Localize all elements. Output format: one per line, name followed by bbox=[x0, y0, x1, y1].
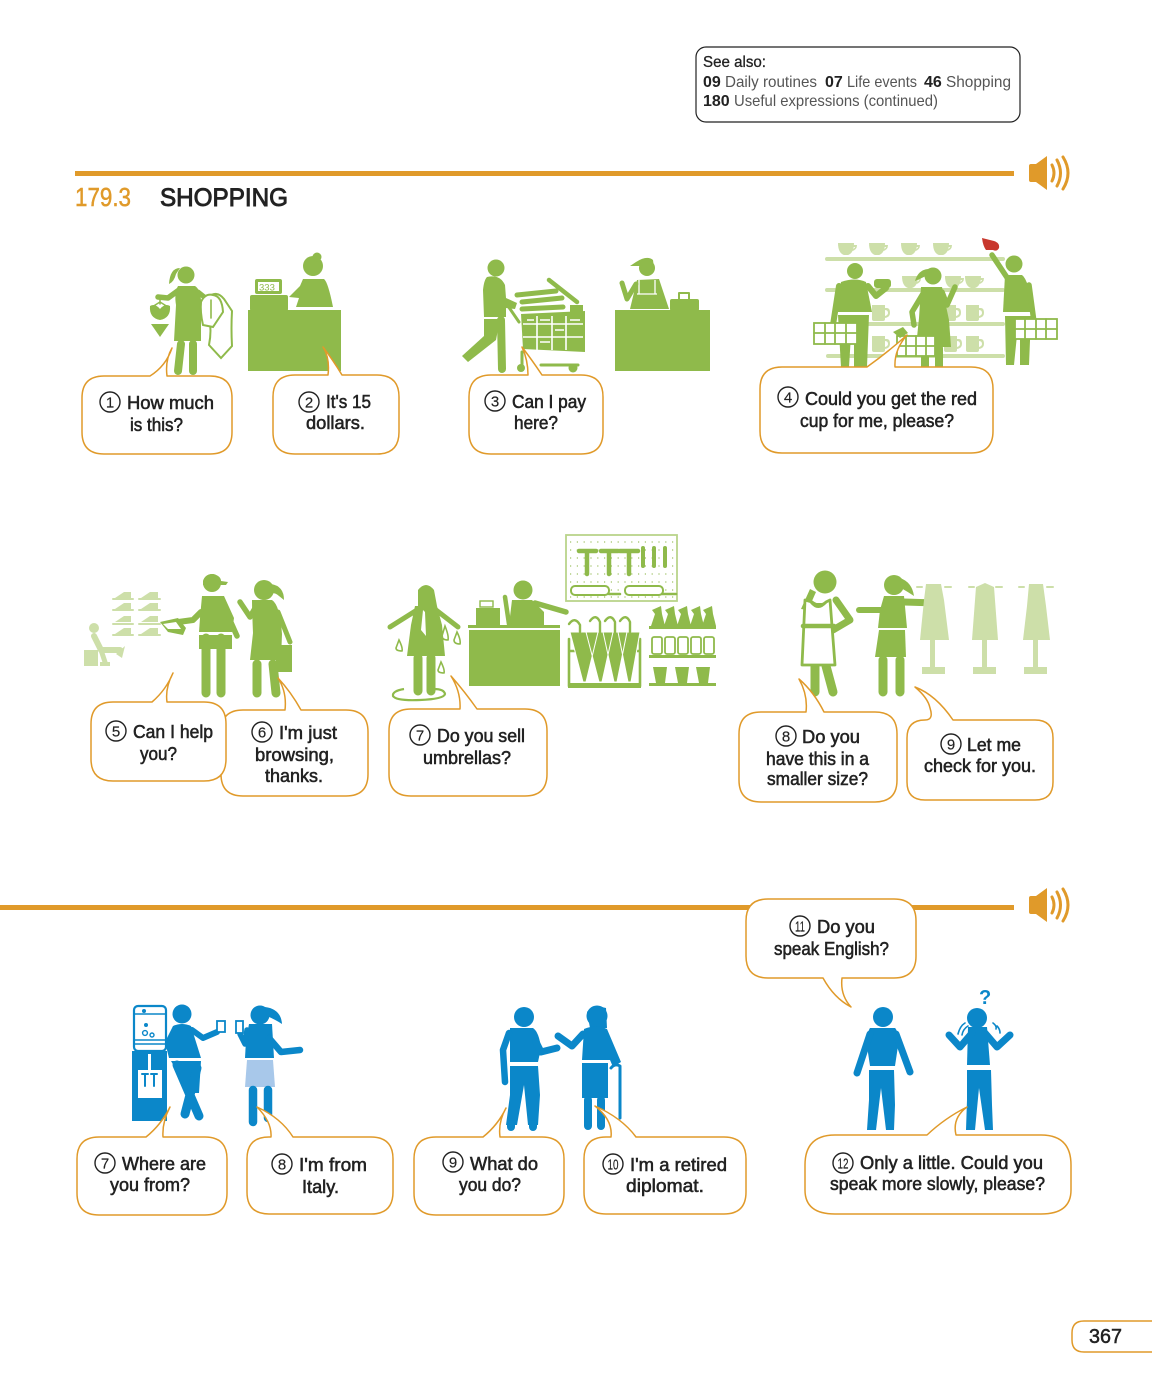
heading: shopping: SHOPPING bbox=[160, 184, 288, 212]
illustration: shop assistant with shoe bbox=[160, 574, 237, 693]
callout 4 bbox=[760, 335, 993, 453]
callout 8 lower bbox=[247, 1107, 393, 1214]
section rule: second section bbox=[0, 905, 1014, 910]
callout 6: I'm just bbox=[279, 723, 337, 743]
illustration: shopkeeper at counter bbox=[468, 580, 566, 686]
callout 9 lower: 9 bbox=[449, 1154, 457, 1172]
callout 8 lower: 8 bbox=[278, 1156, 286, 1174]
callout 5: 5 bbox=[112, 724, 120, 740]
illustration: woman with basket bbox=[893, 268, 955, 367]
see also box: Shopping bbox=[946, 74, 1011, 91]
callout 11: 11 bbox=[795, 918, 805, 936]
callout 6: 6 bbox=[258, 724, 266, 742]
callout 6: thanks. bbox=[265, 766, 323, 786]
callout 9 bbox=[907, 687, 1053, 800]
callout 8: 8 bbox=[782, 728, 790, 746]
callout 11: Do you bbox=[817, 917, 875, 937]
callout 3: Can I pay bbox=[512, 392, 586, 412]
icon: red cup bbox=[982, 238, 999, 251]
callout 7 lower bbox=[77, 1107, 227, 1215]
callout 2: 2 bbox=[305, 394, 313, 412]
callout 8: smaller size? bbox=[767, 769, 868, 789]
illustration: confused man with question mark: ? bbox=[979, 987, 991, 1009]
callout 3: here? bbox=[514, 413, 558, 433]
illustration: man reaching red cup bbox=[982, 238, 1057, 365]
callout 9 lower: you do? bbox=[459, 1175, 521, 1195]
callout 7: Do you sell bbox=[437, 726, 525, 746]
icon: speaker top bbox=[1029, 156, 1068, 190]
callout 2: dollars. bbox=[306, 413, 365, 433]
illustration: shelves with cups bbox=[827, 243, 1003, 356]
see also box: 46 bbox=[924, 74, 942, 91]
callout 8: Do you bbox=[802, 727, 860, 747]
callout 9: check for you. bbox=[924, 756, 1036, 776]
callout 12: Only a little. Could you bbox=[860, 1153, 1043, 1173]
see also box: 07 bbox=[825, 74, 843, 91]
callout 8: have this in a bbox=[766, 749, 870, 769]
illustration: woman with swimwear bbox=[150, 266, 232, 371]
illustration: standing man bbox=[857, 1007, 910, 1130]
see also box: Life events bbox=[847, 74, 917, 91]
illustration: woman with cup bbox=[236, 1006, 300, 1122]
callout 1 bbox=[82, 348, 232, 454]
illustration: cashier at counter: 333 bbox=[259, 282, 275, 294]
callout 9: 9 bbox=[947, 736, 955, 754]
illustration: cashier with cap bbox=[615, 258, 710, 371]
illustration: seated customer trying shoes bbox=[84, 623, 125, 666]
callout 9 lower bbox=[414, 1108, 564, 1215]
callout 2 bbox=[273, 347, 399, 454]
see also box: See also: bbox=[703, 54, 766, 71]
callout 3: 3 bbox=[491, 394, 499, 410]
callout 8 bbox=[739, 679, 897, 802]
callout 7: umbrellas? bbox=[423, 748, 511, 768]
callout 7 lower: you from? bbox=[110, 1175, 190, 1195]
callout 2: It's 15 bbox=[326, 392, 371, 412]
see also box bbox=[696, 47, 1020, 122]
callout 6 bbox=[221, 678, 368, 796]
see also box: 180 bbox=[703, 93, 730, 110]
illustration: woman holding dress bbox=[801, 570, 850, 692]
icon: speaker lower bbox=[1029, 888, 1068, 922]
callout 11 bbox=[746, 899, 916, 1007]
illustration: tool pegboard bbox=[566, 535, 677, 601]
illustration: umbrella stand bbox=[568, 617, 641, 688]
illustration: cashier at counter bbox=[248, 252, 341, 371]
callout 10 bbox=[584, 1106, 746, 1214]
callout 12: 12 bbox=[838, 1156, 848, 1172]
callout 9 lower: What do bbox=[470, 1154, 538, 1174]
callout 11: speak English? bbox=[774, 939, 889, 959]
illustration: shop assistant pointing bbox=[859, 575, 936, 692]
section rule: shopping bbox=[75, 171, 1014, 176]
callout 12 bbox=[805, 1107, 1071, 1214]
callout 8 lower: I'm from bbox=[299, 1155, 367, 1175]
callout 10: diplomat. bbox=[626, 1176, 704, 1196]
illustration: elderly woman with cane bbox=[558, 1006, 621, 1126]
illustration: shopper holding cup bbox=[814, 263, 891, 367]
callout 6: browsing, bbox=[255, 745, 334, 765]
callout 1: is this? bbox=[130, 415, 183, 435]
illustration: confused man with question mark bbox=[949, 987, 1010, 1130]
see also box: Useful expressions (continued) bbox=[734, 93, 938, 110]
page number tab: 367 bbox=[1089, 1326, 1122, 1348]
callout 8 lower: Italy. bbox=[302, 1177, 339, 1197]
illustration: wet woman dripping bbox=[390, 585, 460, 700]
callout 1: 1 bbox=[106, 394, 114, 412]
callout 4: 4 bbox=[784, 390, 792, 406]
callout 4: cup for me, please? bbox=[800, 411, 954, 431]
callout 7 bbox=[389, 676, 547, 796]
callout 1: How much bbox=[127, 393, 214, 413]
callout 10: I'm a retired bbox=[630, 1155, 727, 1175]
callout 5 bbox=[91, 673, 226, 781]
callout 7 lower: Where are bbox=[122, 1154, 206, 1174]
illustration: shoe shelves bbox=[113, 592, 160, 635]
illustration: man asking bbox=[503, 1007, 557, 1127]
callout 7 lower: 7 bbox=[101, 1156, 109, 1172]
illustration: man with shopping cart bbox=[462, 260, 585, 372]
illustration: man with cup bbox=[165, 1004, 225, 1116]
callout 9: Let me bbox=[967, 735, 1021, 755]
see also box: Daily routines bbox=[725, 74, 817, 91]
illustration: woman browsing with bag bbox=[240, 580, 292, 693]
illustration: shelves of cleaning products bbox=[649, 606, 716, 686]
callout 5: Can I help bbox=[133, 722, 213, 742]
callout 4: Could you get the red bbox=[805, 389, 977, 409]
callout 10: 10 bbox=[608, 1156, 618, 1174]
section number: 179.3 bbox=[75, 182, 131, 212]
callout 7: 7 bbox=[416, 728, 424, 744]
illustration: water cooler bbox=[132, 1006, 167, 1121]
callout 5: you? bbox=[140, 744, 177, 764]
callout 3 bbox=[469, 347, 603, 454]
illustration: dresses on mannequins bbox=[917, 583, 1053, 674]
see also box: 09 bbox=[703, 74, 721, 91]
page number tab bbox=[1072, 1321, 1152, 1352]
callout 12: speak more slowly, please? bbox=[830, 1174, 1045, 1194]
